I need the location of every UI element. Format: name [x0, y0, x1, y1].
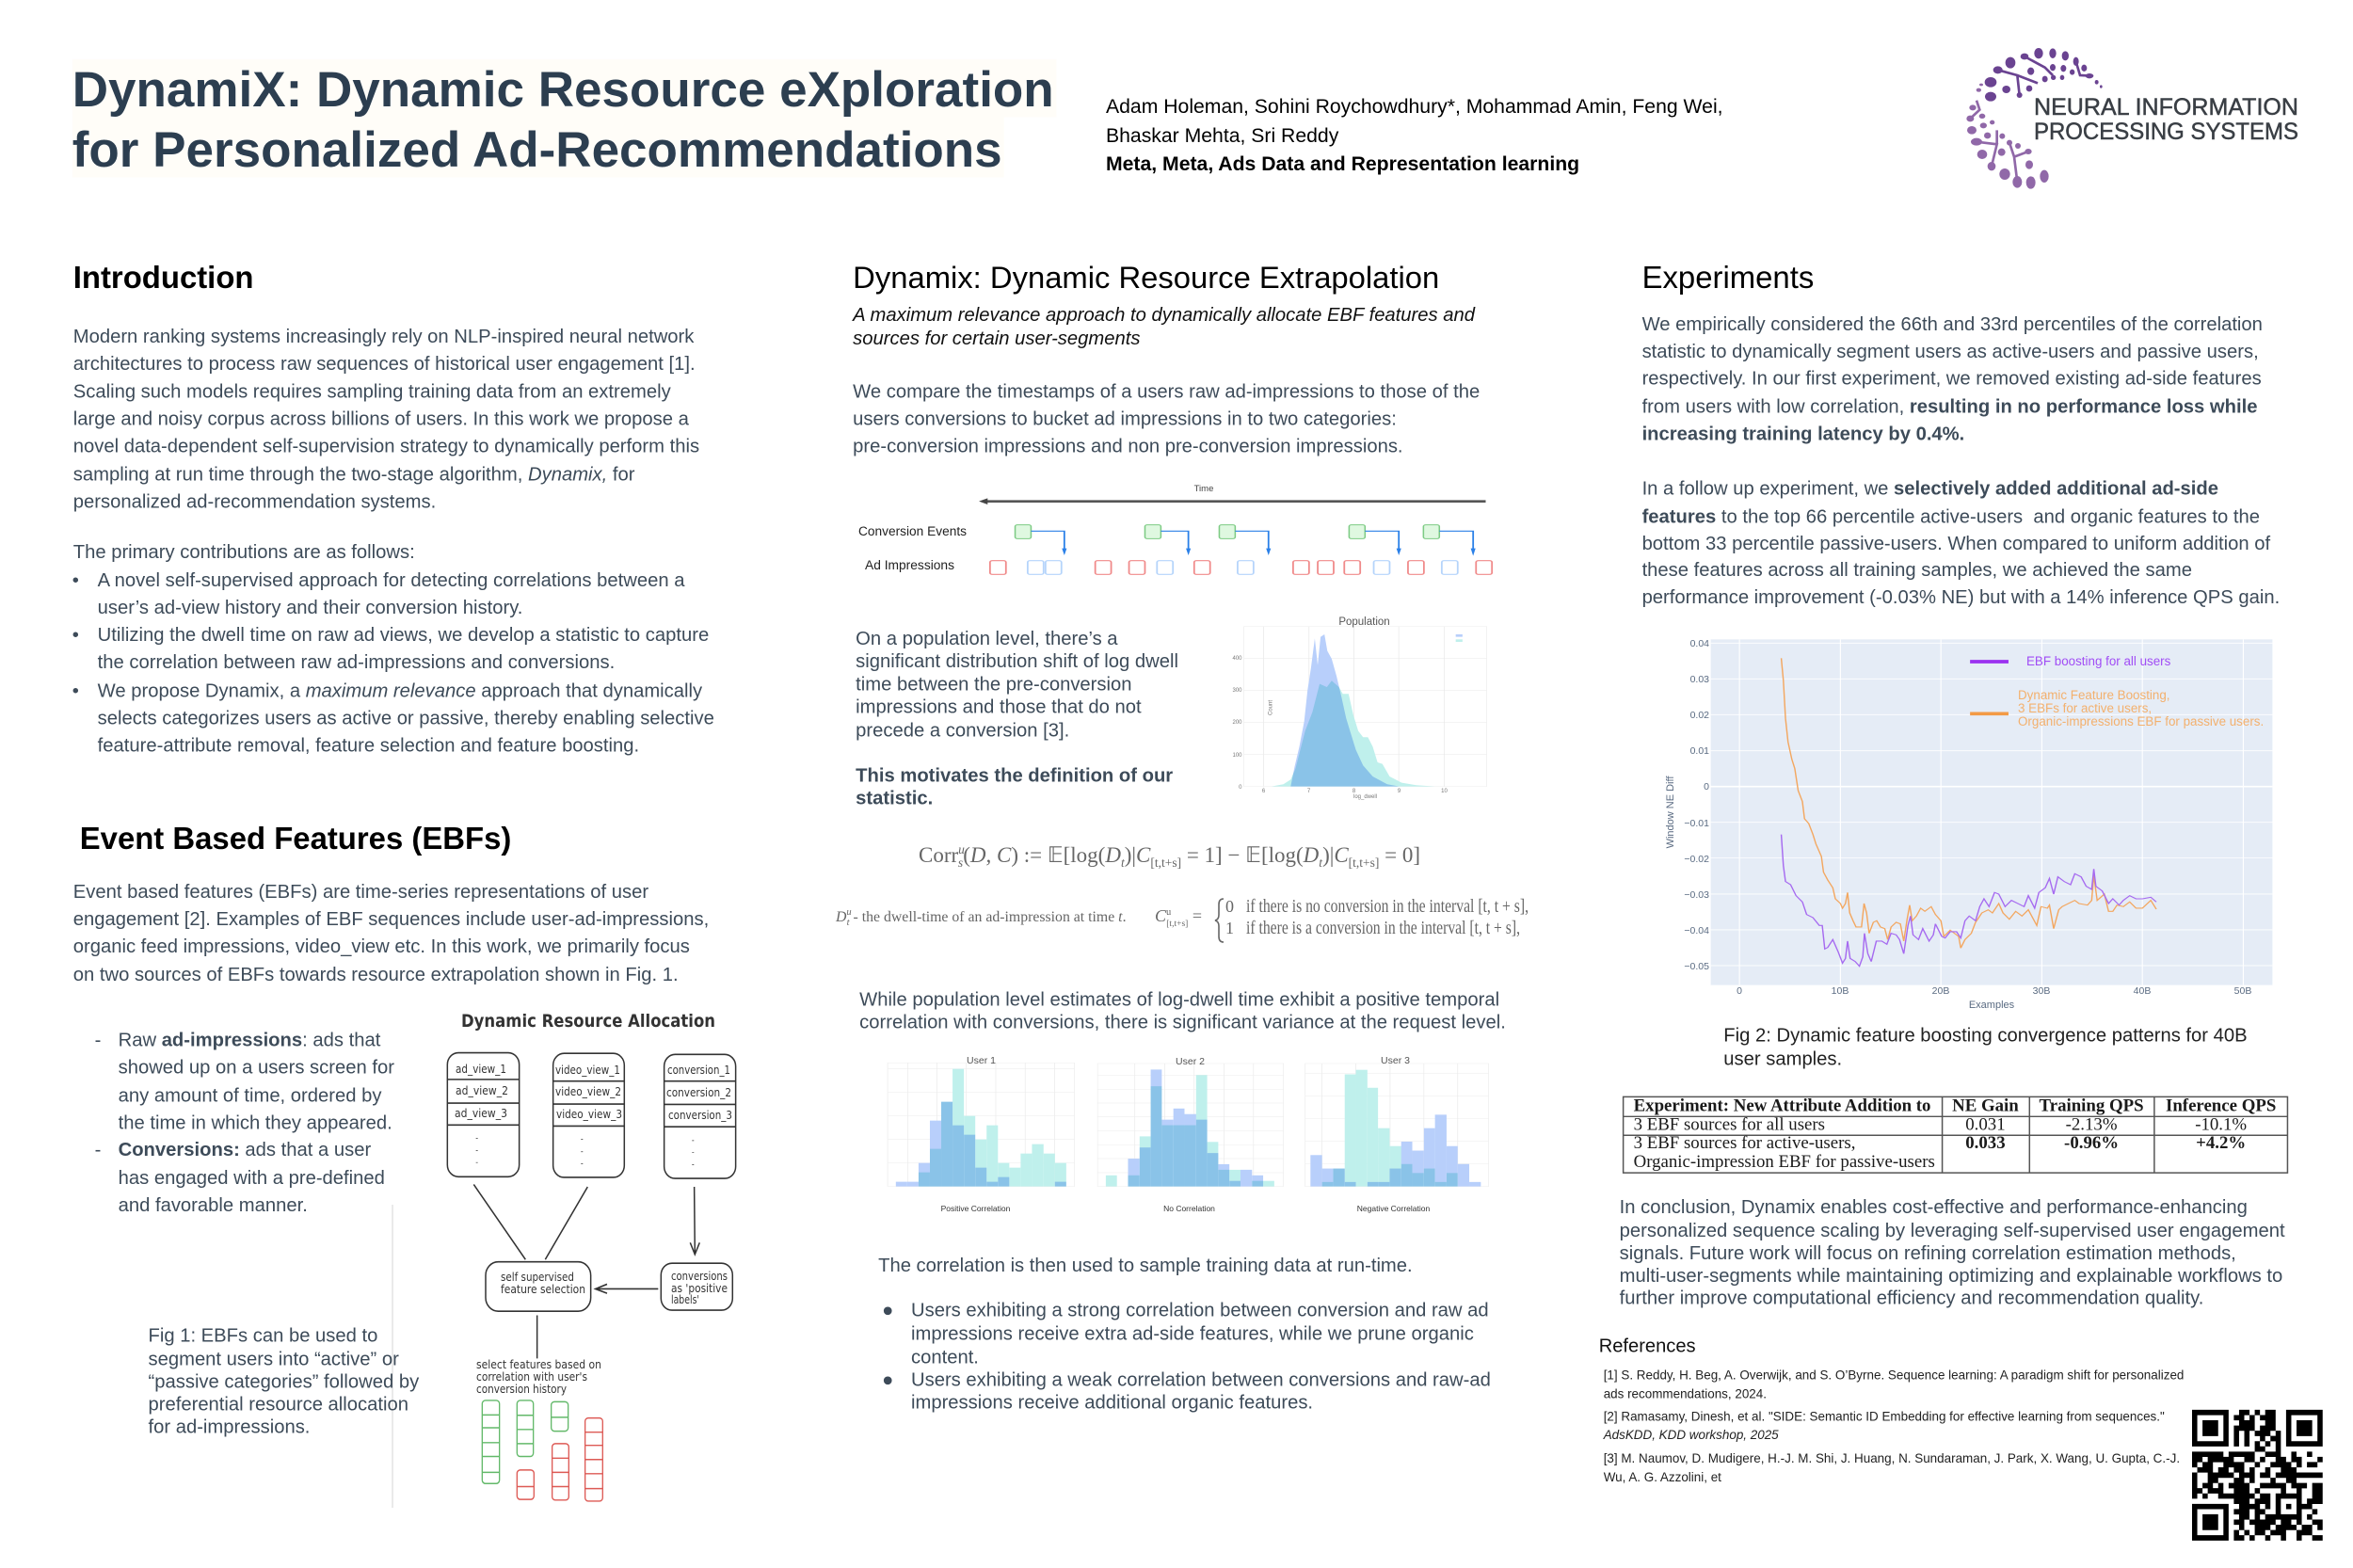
line chart: convergence: −0.05	[1684, 961, 1709, 972]
equation: definitions: t	[847, 918, 851, 928]
text block: timestamps: We compare the timestamps of a users raw ad-impressions to those of the	[853, 382, 1480, 403]
text block: primary contributions: Utilizing the dwell time on raw ad views, we develop a statistic to capture	[98, 625, 709, 646]
histogram: population: 400	[1232, 656, 1242, 662]
diagram: dynamic resource allocation: conversions	[671, 1270, 728, 1283]
text block: conclusion: further improve computational efficiency and recommendation quality.	[1620, 1288, 2203, 1309]
histograms: users	[888, 1055, 1489, 1213]
line chart: convergence: Window NE Diff	[1665, 776, 1676, 848]
histogram: population: log_dwell	[1353, 794, 1377, 800]
histogram: population: 0	[1239, 785, 1242, 791]
text block: conclusion: multi-user-segments while maintaining optimizing and explainable workflows to	[1620, 1266, 2282, 1287]
equation: correlation statistic: D	[1303, 843, 1320, 867]
equation: correlation statistic: Corr	[919, 843, 958, 867]
text block: primary contributions: •	[72, 625, 79, 646]
text block: timestamps: users conversions to bucket ad impressions in to two categories:	[853, 409, 1397, 430]
text block: correlation use: Users exhibiting a strong correlation between conversion and raw ad	[911, 1301, 1489, 1321]
text block: population level: significant distribution shift of log dwell	[856, 651, 1178, 672]
diagram: dynamic resource allocation: ad_view_1	[456, 1063, 506, 1076]
subtitle: A maximum relevance approach to dynamically allocate EBF features and	[852, 305, 1476, 326]
text block: correlation use: ●	[882, 1369, 893, 1390]
line chart: convergence: EBF boosting for all users	[2026, 654, 2171, 668]
text block: first experiment: respectively. In our first experiment, we removed existing ad-side features	[1642, 369, 2262, 390]
line chart: convergence: −0.04	[1684, 925, 1709, 936]
line chart: convergence: 0.01	[1690, 745, 1709, 757]
references: [3] M. Naumov, D. Mudigere, H.-J. M. Shi, J. Huang, N. Sundaraman, J. Park, X. Wang, U. Gupta, C.-J.	[1604, 1451, 2180, 1465]
text block: follow up experiment: In a follow up experiment, we selectively added additional ad-side	[1642, 478, 2218, 499]
text block: conclusion	[1620, 1197, 2285, 1309]
diagram: dynamic resource allocation: video_view_3	[556, 1108, 622, 1121]
equation: definitions: if there is a conversion in the interval [t, t + s],	[1246, 918, 1520, 938]
diagram: dynamic resource allocation: conversion_2	[666, 1086, 731, 1099]
text block: timestamps	[853, 382, 1480, 457]
text block: primary contributions: user’s ad-view history and their conversion history.	[98, 598, 522, 618]
diagram: dynamic resource allocation: self supervised	[501, 1271, 574, 1284]
text block: primary contributions: We propose Dynamix, a maximum relevance approach that dynamically	[98, 681, 703, 702]
text block: EBF sources list: -	[95, 1140, 101, 1160]
text block: EBF sources list: the time in which they appeared.	[119, 1112, 392, 1133]
title: DynamiX: Dynamic Resource eXploration	[72, 62, 1054, 118]
equation: definitions: u	[846, 907, 852, 918]
text block: primary contributions	[72, 542, 714, 757]
heading: Dynamix: Dynamix: Dynamic Resource Extrapolation	[853, 260, 1439, 295]
text block: first experiment: increasing training latency by 0.4%.	[1642, 424, 1964, 445]
histogram: population: 8	[1353, 789, 1356, 794]
text block: introduction: sampling at run time through the two-stage algorithm, Dynamix, for	[73, 464, 635, 485]
text block: correlation use: content.	[911, 1347, 979, 1368]
text block: introduction: Modern ranking systems increasingly rely on NLP-inspired neural network	[73, 327, 695, 347]
text block: request level variance	[859, 990, 1506, 1033]
figure caption: Fig 1	[149, 1326, 420, 1437]
line chart: convergence: −0.01	[1684, 818, 1709, 829]
equation: definitions: 0	[1225, 897, 1234, 916]
text block: request level variance: While population level estimates of log-dwell time exhibit a positive temporal	[859, 990, 1499, 1011]
figure caption: Fig 1: for ad-impressions.	[149, 1416, 310, 1437]
diagram: dynamic resource allocation: select features based on	[476, 1358, 601, 1371]
text block: primary contributions: •	[72, 570, 79, 591]
line chart: convergence: Dynamic Feature Boosting,	[2018, 688, 2170, 702]
equation: correlation statistic: C	[1136, 843, 1151, 867]
QR code	[2192, 1413, 2323, 1538]
text block: primary contributions: The primary contributions are as follows:	[73, 542, 415, 563]
text block: population level: This motivates the definition of our	[856, 765, 1173, 786]
text block: EBF description: engagement [2]. Examples of EBF sequences include user-ad-impressions,	[73, 909, 709, 930]
text block: first experiment: We empirically considered the 66th and 33rd percentiles of the correlation	[1642, 314, 2263, 335]
diagram: dynamic resource allocation: conversion history	[476, 1383, 567, 1396]
text block: EBF description	[73, 882, 709, 985]
subtitle: sources for certain user-segments	[853, 328, 1140, 349]
equation: correlation statistic: (	[963, 843, 970, 867]
histogram: population: Count	[1269, 700, 1274, 715]
figure caption: Fig 1: preferential resource allocation	[149, 1394, 408, 1415]
equation: correlation statistic: t	[1319, 856, 1323, 870]
line chart: convergence: Examples	[1969, 1000, 2015, 1011]
figure caption: Fig 1: segment users into “active” or	[149, 1349, 399, 1369]
text block: population level: time between the pre-conversion	[856, 675, 1132, 696]
table: experiment results: +4.2%	[2196, 1133, 2246, 1153]
authors: Bhaskar Mehta, Sri Reddy	[1106, 125, 1339, 147]
text block: primary contributions: A novel self-supervised approach for detecting correlations between a	[98, 570, 685, 591]
table: experiment results: -10.1%	[2195, 1114, 2247, 1134]
text block: EBF description: Event based features (EBFs) are time-series representations of user	[73, 882, 648, 903]
text block: correlation use: Users exhibiting a weak correlation between conversions and raw-ad	[911, 1369, 1491, 1390]
diagram: dynamic resource allocation: video_view_1	[555, 1064, 620, 1077]
histograms: users: User 2	[1176, 1056, 1205, 1067]
table: experiment results: -0.96%	[2064, 1133, 2119, 1153]
text block: request level variance: correlation with conversions, there is significant variance at the request level.	[859, 1013, 1506, 1033]
text block: population level	[856, 629, 1178, 808]
equation: definitions: =	[1188, 906, 1202, 925]
table: experiment results: Organic-impression EBF for passive-users	[1634, 1152, 1935, 1172]
text block: introduction	[73, 327, 699, 512]
equation: definitions: - the dwell-time of an ad-impression at time	[850, 909, 1118, 925]
equation: correlation statistic: [t,t+s]	[1150, 856, 1181, 870]
text block: follow up experiment: performance improvement (-0.03% NE) but with a 14% inference QPS gain.	[1642, 587, 2280, 608]
equation: definitions: u	[1166, 907, 1172, 918]
text block: introduction: personalized ad-recommendation systems.	[73, 491, 436, 512]
histogram: population	[1232, 616, 1486, 800]
equation: correlation statistic: u	[958, 842, 965, 856]
equation: correlation statistic: )|	[1125, 843, 1136, 867]
text block: correlation use: The correlation is then used to sample training data at run-time.	[878, 1256, 1413, 1276]
heading: Experiments: Experiments	[1642, 260, 1814, 295]
diagram: dynamic resource allocation: Dynamic Resource Allocation	[461, 1011, 715, 1032]
equation: definitions: 1	[1225, 919, 1234, 937]
text block: EBF sources list: Raw ad-impressions: ads that	[119, 1031, 381, 1051]
timeline diagram: Conversion Events	[858, 524, 967, 538]
authors: Meta, Meta, Ads Data and Representation learning	[1106, 153, 1579, 175]
line chart: convergence: −0.03	[1684, 889, 1709, 901]
diagram: dynamic resource allocation: ad_view_3	[455, 1107, 507, 1120]
text block: correlation use: impressions receive additional organic features.	[911, 1392, 1313, 1413]
histograms: users: No Correlation	[1163, 1204, 1215, 1213]
equation: correlation statistic: C	[1334, 843, 1349, 867]
table: experiment results: 3 EBF sources for all users	[1634, 1114, 1825, 1134]
histograms: users: User 3	[1381, 1055, 1410, 1066]
diagram: dynamic resource allocation: as 'positive	[671, 1282, 728, 1295]
table: experiment results: -2.13%	[2066, 1114, 2118, 1134]
histogram: population: Population	[1338, 616, 1390, 628]
line chart: convergence: 50B	[2234, 985, 2251, 997]
references	[1599, 1336, 2184, 1484]
histograms: users: Positive Correlation	[941, 1204, 1011, 1213]
diagram: dynamic resource allocation: video_view_2	[555, 1085, 621, 1098]
references: AdsKDD, KDD workshop, 2025	[1603, 1428, 1779, 1442]
line chart: convergence: 0.02	[1690, 710, 1709, 721]
text block: EBF sources list: any amount of time, ordered by	[119, 1085, 382, 1106]
histogram: population: 300	[1232, 688, 1242, 694]
histogram: population: 10	[1441, 789, 1448, 794]
text block: conclusion: personalized sequence scaling by leveraging self-supervised user engagement	[1620, 1221, 2285, 1241]
line chart: convergence: 10B	[1832, 985, 1849, 997]
line chart: convergence: 30B	[2033, 985, 2050, 997]
text block: timestamps: pre-conversion impressions and non pre-conversion impressions.	[853, 437, 1403, 457]
equation: correlation statistic: D, C) := 𝔼[log(D	[970, 843, 1121, 867]
histograms: users: Negative Correlation	[1357, 1204, 1431, 1213]
chart: user 1	[888, 1063, 1075, 1187]
text block: correlation use: impressions receive extra ad-side features, while we prune organic	[911, 1324, 1474, 1345]
text block: first experiment	[1642, 314, 2263, 445]
text block: introduction: novel data-dependent self-supervision strategy to dynamically perform this	[73, 437, 699, 457]
line chart: convergence: 0.04	[1690, 638, 1709, 649]
figure caption: Fig 2: user samples.	[1723, 1048, 1842, 1069]
histogram: population: 7	[1307, 789, 1311, 794]
references: ads recommendations, 2024.	[1604, 1386, 1767, 1400]
histogram: population: 9	[1398, 789, 1401, 794]
text block: introduction: Scaling such models requires sampling training data from an extremely	[73, 382, 672, 403]
text block: population level: precede a conversion [3].	[856, 721, 1069, 742]
text block: primary contributions: feature-attribute removal, feature selection and feature boosting.	[98, 736, 639, 757]
text block: EBF sources list: -	[95, 1031, 101, 1051]
text block: introduction: large and noisy corpus across billions of users. In this work we propose a	[73, 409, 690, 430]
histogram: population: 6	[1262, 789, 1266, 794]
timeline diagram	[858, 484, 1492, 574]
table: experiment results: 0.033	[1965, 1133, 2006, 1153]
text block: follow up experiment: features to the top 66 percentile active-users and organic features to the	[1642, 506, 2260, 527]
text block: correlation use	[878, 1256, 1491, 1413]
equation: definitions: D	[835, 909, 847, 925]
logo: NeurIPS	[1966, 48, 2298, 189]
text block: EBF sources list: Conversions: ads that a user	[119, 1140, 371, 1160]
diagram: dynamic resource allocation: labels'	[671, 1293, 699, 1306]
table: experiment results	[1624, 1096, 2287, 1173]
authors: Adam Holeman, Sohini Roychowdhury*, Mohammad Amin, Feng Wei,	[1106, 96, 1723, 118]
equation: correlation statistic: = 0]	[1379, 843, 1420, 867]
figure caption: Fig 1: “passive categories” followed by	[149, 1371, 420, 1392]
line chart: convergence: Organic-impressions EBF for passive users.	[2018, 714, 2264, 728]
logo: NeurIPS: PROCESSING SYSTEMS	[2034, 119, 2298, 145]
histogram: population: 200	[1232, 720, 1242, 726]
table: experiment results: Experiment: New Attribute Addition to	[1634, 1096, 1930, 1115]
line chart: convergence: −0.02	[1684, 854, 1709, 865]
line chart: convergence: 3 EBFs for active users,	[2018, 701, 2152, 715]
table: experiment results: NE Gain	[1952, 1096, 2019, 1115]
authors	[1106, 96, 1723, 175]
logo: NeurIPS: NEURAL INFORMATION	[2034, 94, 2298, 120]
text block: first experiment: from users with low correlation, resulting in no performance loss while	[1642, 397, 2257, 418]
text block: first experiment: statistic to dynamically segment users as active-users and passive users,	[1642, 342, 2259, 362]
line chart: convergence: 0	[1737, 985, 1742, 997]
text block: EBF sources list: has engaged with a pre-defined	[119, 1168, 385, 1189]
text block: follow up experiment: these features across all training samples, we achieved the same	[1642, 560, 2192, 581]
equation: definitions: t.	[1118, 909, 1127, 925]
diagram: dynamic resource allocation: conversion_3	[668, 1109, 732, 1122]
histogram: population: 100	[1232, 753, 1242, 759]
timeline diagram: Ad Impressions	[865, 558, 954, 572]
line chart: convergence: 0	[1704, 781, 1709, 792]
chart: user 3	[1305, 1064, 1489, 1187]
diagram: dynamic resource allocation: feature selection	[501, 1283, 585, 1296]
text block: EBF sources list: and favorable manner.	[119, 1195, 308, 1216]
diagram: dynamic resource allocation: ad_view_2	[456, 1084, 508, 1097]
text block: conclusion: signals. Future work will focus on refining correlation estimation methods,	[1620, 1243, 2236, 1264]
figure caption: Fig 1: Fig 1: EBFs can be used to	[149, 1326, 377, 1347]
heading: Event Based Features: Event Based Features (EBFs)	[80, 821, 511, 856]
text block: primary contributions: •	[72, 681, 79, 702]
equation: definitions: if there is no conversion in the interval [t, t + s],	[1246, 896, 1529, 917]
equation: correlation statistic: )|	[1322, 843, 1334, 867]
text block: correlation use: ●	[882, 1301, 893, 1321]
equation: correlation statistic: [t,t+s]	[1349, 856, 1379, 870]
text block: EBF description: on two sources of EBFs towards resource extrapolation shown in Fig. 1.	[73, 965, 679, 985]
subtitle	[852, 305, 1476, 349]
chart: user 2	[1097, 1064, 1284, 1187]
diagram: dynamic resource allocation: conversion_1	[667, 1064, 730, 1077]
table: experiment results: 3 EBF sources for active-users,	[1634, 1133, 1855, 1153]
text block: population level: statistic.	[856, 788, 933, 808]
equation: definitions: C	[1155, 906, 1167, 925]
references: [1] S. Reddy, H. Beg, A. Overwijk, and S. O’Byrne. Sequence learning: A paradigm shift for personalized	[1604, 1368, 2184, 1382]
references: [2] Ramasamy, Dinesh, et al. "SIDE: Semantic ID Embedding for effective learning from sequences."	[1604, 1409, 2165, 1423]
line chart: convergence: 20B	[1932, 985, 1949, 997]
text block: conclusion: In conclusion, Dynamix enables cost-effective and performance-enhancing	[1620, 1197, 2248, 1218]
equation: correlation statistic: t	[1121, 856, 1126, 870]
line chart: convergence: 40B	[2134, 985, 2151, 997]
text block: introduction: architectures to process raw sequences of historical user engagement [1].	[73, 354, 696, 375]
line chart: convergence	[1665, 638, 2272, 1011]
table: experiment results: 0.031	[1965, 1114, 2006, 1134]
text block: EBF description: organic feed impressions, video_view etc. In this work, we primarily focus	[73, 936, 690, 957]
text block: primary contributions: selects categorizes users as active or passive, thereby enabling selective	[98, 709, 714, 729]
timeline diagram: Time	[1194, 484, 1213, 494]
references: References	[1599, 1336, 1696, 1357]
text block: follow up experiment: bottom 33 percentile passive-users. When compared to uniform addition of	[1642, 534, 2271, 554]
text block: EBF sources list	[95, 1031, 394, 1216]
equation: definitions	[835, 896, 1529, 942]
figure caption: Fig 2	[1723, 1026, 2248, 1069]
histograms: users: User 1	[967, 1055, 996, 1066]
text block: EBF sources list: showed up on a users screen for	[119, 1057, 394, 1078]
text block: follow up experiment	[1642, 478, 2280, 608]
equation: correlation statistic: s	[958, 856, 963, 870]
text block: population level: impressions and those that do not	[856, 697, 1142, 718]
title	[72, 59, 1057, 178]
title: for Personalized Ad-Recommendations	[72, 122, 1002, 178]
diagram: dynamic resource allocation: correlation with user's	[476, 1370, 587, 1384]
text block: primary contributions: the correlation between raw ad-impressions and conversions.	[98, 652, 615, 673]
equation: definitions: [t,t+s]	[1166, 920, 1188, 929]
references: Wu, A. G. Azzolini, et	[1604, 1470, 1721, 1484]
diagram: dynamic resource allocation	[447, 1011, 736, 1501]
table: experiment results: Training QPS	[2040, 1096, 2144, 1115]
table: experiment results: Inference QPS	[2166, 1096, 2276, 1115]
heading: Introduction: Introduction	[73, 260, 253, 295]
line chart: convergence: 0.03	[1690, 674, 1709, 685]
text block: population level: On a population level, there’s a	[856, 629, 1118, 649]
figure caption: Fig 2: Fig 2: Dynamic feature boosting convergence patterns for 40B	[1723, 1026, 2248, 1047]
equation: correlation statistic: = 1] − 𝔼[log(	[1181, 843, 1304, 867]
